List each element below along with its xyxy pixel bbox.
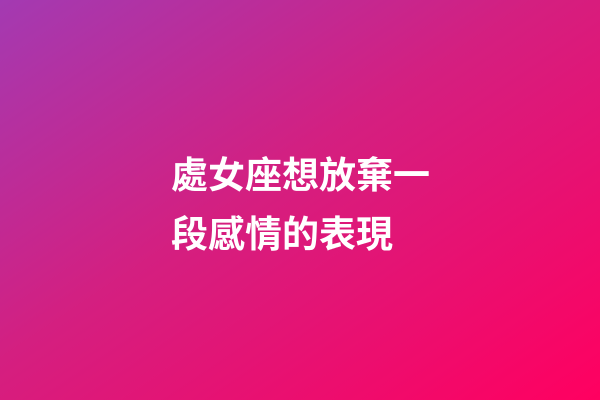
- title line 1: 處女座想放棄一: [171, 155, 430, 196]
- title: [171, 155, 430, 255]
- title line 2: 段感情的表現: [171, 214, 393, 255]
